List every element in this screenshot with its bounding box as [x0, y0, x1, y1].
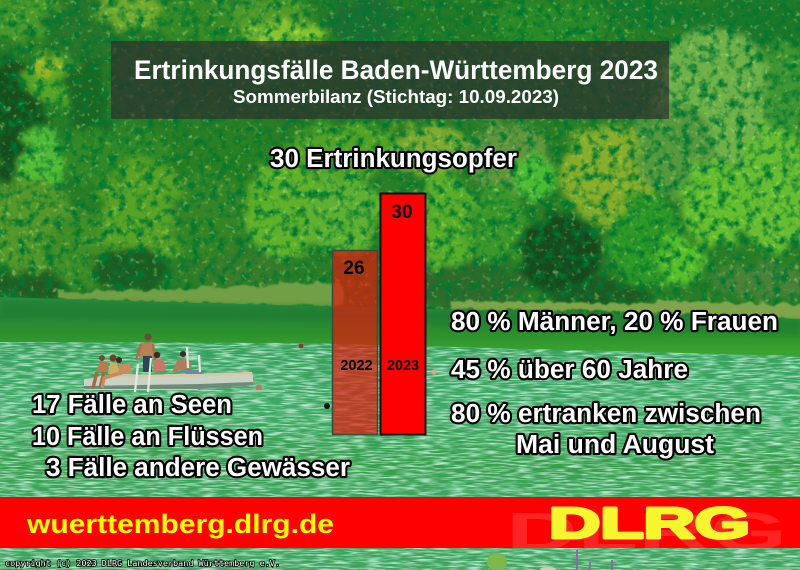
statistics: water bodies: [32, 391, 350, 482]
photo detail: bathing raft with people: [84, 334, 437, 409]
bar 2022: [332, 250, 378, 434]
statistics: water bodies: 10 Fälle an Flüssen: [32, 423, 263, 451]
background: lake water: [0, 297, 800, 570]
statistics: victims: [451, 308, 778, 459]
DLRG logo: DLRG: [549, 499, 750, 548]
bar 2023: 30: [391, 202, 413, 223]
statistics: victims: 80 % Männer, 20 % Frauen: [451, 308, 778, 336]
subtitle: Sommerbilanz (Stichtag: 10.09.2023): [233, 86, 559, 107]
statistics: victims: 80 % ertranken zwischen: [451, 400, 761, 428]
bar 2023: 2023: [387, 358, 419, 374]
shoreline reeds: [60, 282, 800, 320]
background: forest: [0, 0, 800, 322]
statistics: victims: 45 % über 60 Jahre: [451, 356, 688, 384]
bar 2022: 26: [343, 258, 365, 279]
logo watermark: DLRG: [506, 502, 787, 562]
footer band: [0, 497, 800, 548]
copyright: copyright (c) 2023 DLRG Landesverband Württemberg e.V.: [5, 559, 280, 568]
statistics: water bodies: 17 Fälle an Seen: [32, 391, 232, 419]
bar 2022: 2022: [340, 358, 373, 374]
statistics: water bodies: 3 Fälle andere Gewässer: [46, 454, 350, 482]
bar chart: [332, 194, 426, 434]
chart heading: 30 Ertrinkungsopfer: [270, 145, 517, 173]
title: Ertrinkungsfälle Baden-Württemberg 2023: [134, 55, 658, 85]
bar 2023: [380, 194, 426, 434]
title panel: [111, 41, 669, 119]
statistics: victims: Mai und August: [516, 431, 715, 459]
photo detail: shore plants: [487, 550, 612, 570]
swimmers and bathers: [93, 334, 437, 409]
website url: wuerttemberg.dlrg.de: [26, 509, 334, 539]
